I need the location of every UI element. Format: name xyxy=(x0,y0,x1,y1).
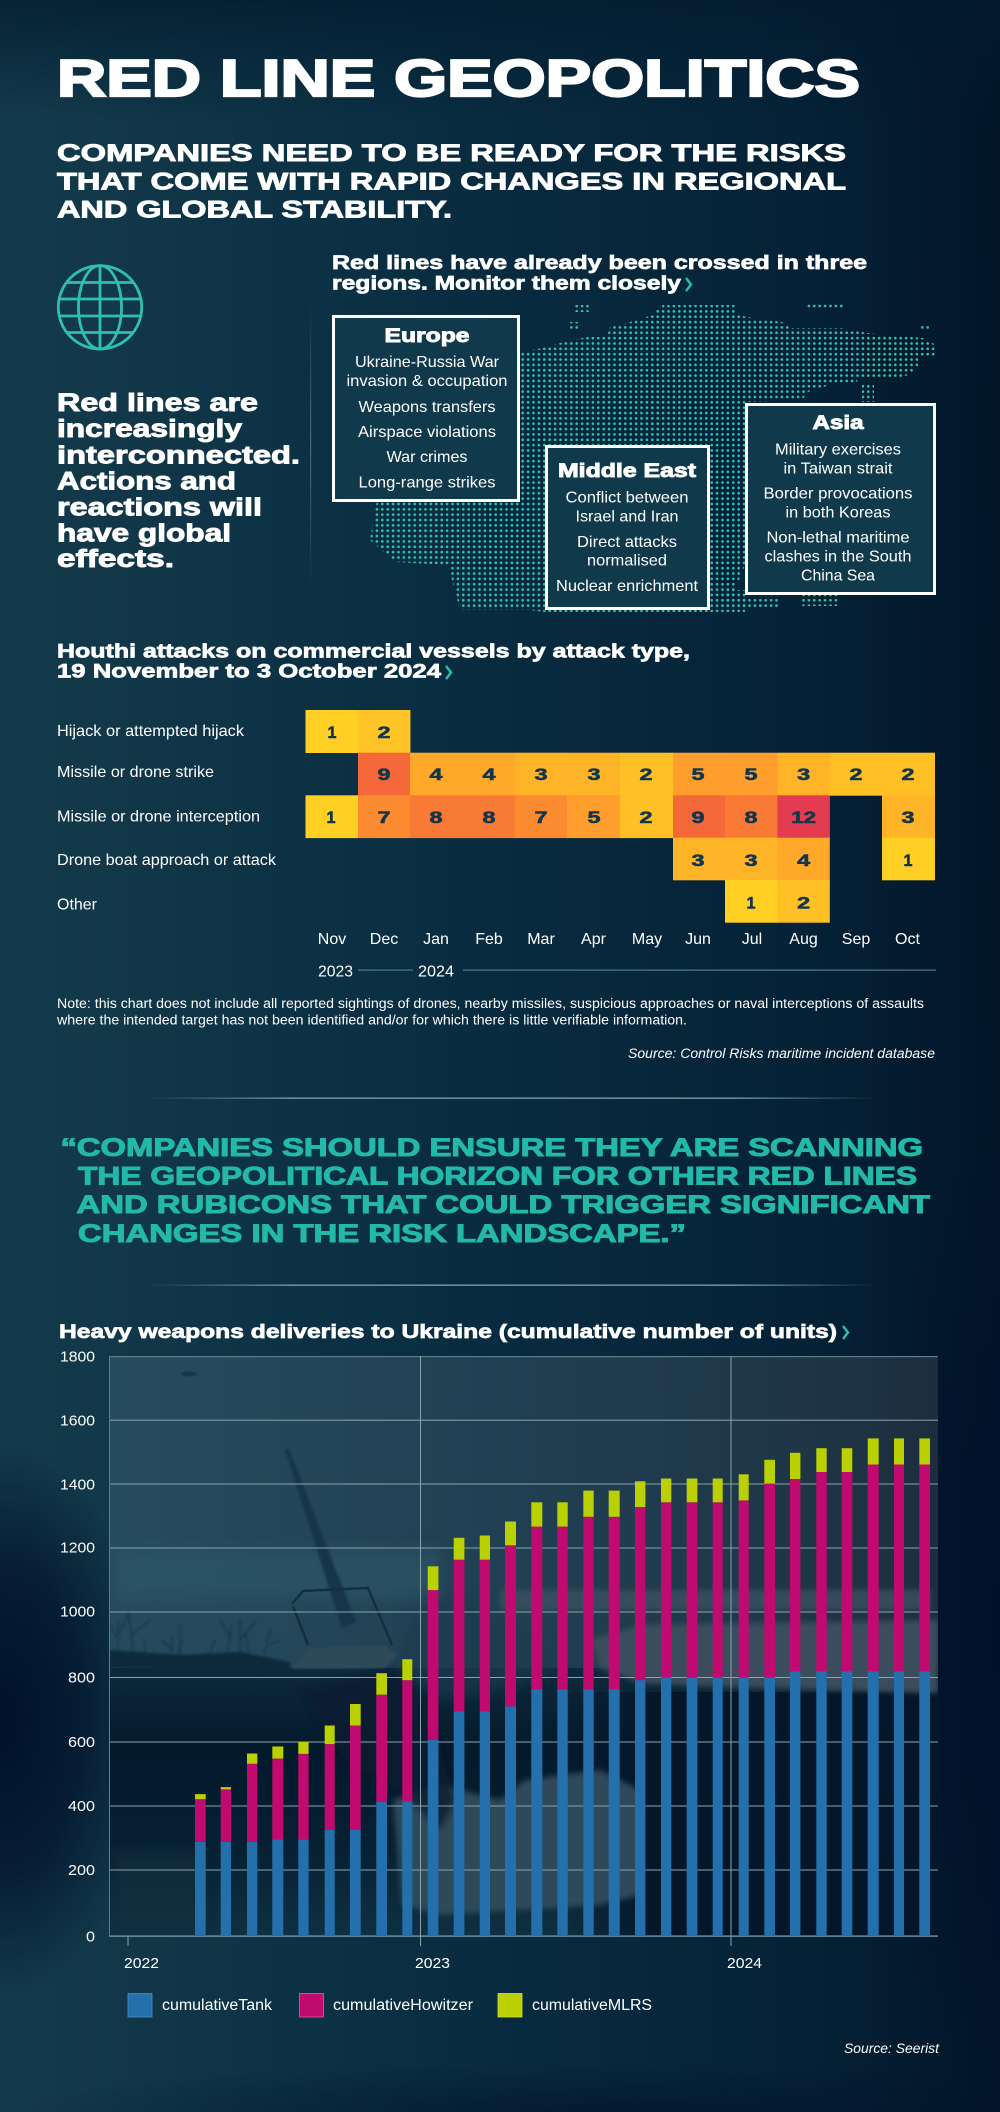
heatmap row: missile or drone interception: 9 xyxy=(692,808,704,827)
panel: Europe: Ukraine-Russia War xyxy=(355,354,500,371)
panel: Asia: China Sea xyxy=(801,568,875,585)
heatmap year axis: 2023 xyxy=(318,964,353,981)
heading: red lines crossed xyxy=(332,253,867,294)
title: RED LINE GEOPOLITICS xyxy=(57,50,860,108)
note xyxy=(56,996,924,1028)
heatmap row: missile or drone strike: 5 xyxy=(744,765,758,784)
heatmap month labels: Jun xyxy=(685,931,711,948)
heatmap row: drone boat: 4 xyxy=(797,851,811,870)
heatmap month labels: Oct xyxy=(895,931,920,948)
y axis labels: 1400 xyxy=(60,1476,95,1494)
heatmap row labels xyxy=(57,723,277,913)
text block: red lines interconnected: have global xyxy=(57,520,231,548)
chart legend: cumulativeTank xyxy=(162,1997,272,2014)
dotted world map xyxy=(370,304,936,612)
heatmap month labels: Aug xyxy=(789,931,818,948)
y axis labels: 800 xyxy=(68,1670,95,1686)
panel: Europe: War crimes xyxy=(386,449,468,466)
panel: Asia xyxy=(746,404,934,594)
heatmap row: hijack: 2 xyxy=(378,723,390,742)
heatmap row: other: 2 xyxy=(797,894,810,912)
panel: Asia: in both Koreas xyxy=(786,505,890,522)
panel: Europe: Weapons transfers xyxy=(358,399,496,416)
heatmap row labels: Other xyxy=(57,896,98,913)
subheading xyxy=(57,140,846,224)
x axis labels: 2023 xyxy=(415,1955,450,1972)
y axis labels: 1800 xyxy=(60,1348,95,1366)
heatmap row: missile or drone strike: 3 xyxy=(797,765,810,784)
heatmap row: hijack: 1 xyxy=(328,723,336,742)
heatmap row labels: Missile or drone interception xyxy=(57,809,260,826)
panel: Europe: Europe xyxy=(384,326,470,347)
y axis labels: 200 xyxy=(68,1862,95,1879)
heatmap row: missile or drone strike: 2 xyxy=(902,765,914,784)
heatmap row: missile or drone interception: 1 xyxy=(326,808,336,827)
panel: Asia: Asia xyxy=(812,413,864,434)
heatmap month labels xyxy=(318,931,920,948)
heatmap row: missile or drone strike: 5 xyxy=(692,765,704,784)
heatmap row: missile or drone interception: 3 xyxy=(902,808,914,827)
text block: red lines interconnected: Red lines are xyxy=(57,389,258,417)
heatmap month labels: Jul xyxy=(742,931,762,948)
bar series: cumulativeHowitzer xyxy=(195,1464,930,1842)
text block: red lines interconnected: reactions will xyxy=(57,494,262,522)
x axis labels: 2022 xyxy=(124,1955,159,1972)
heatmap year axis xyxy=(318,964,936,981)
panel: Middle East: Conflict between xyxy=(566,490,688,507)
pull quote: AND RUBICONS THAT COULD TRIGGER SIGNIFICANT xyxy=(76,1191,930,1219)
heatmap year axis: 2024 xyxy=(418,964,454,981)
panel: Europe: Long-range strikes xyxy=(358,474,496,492)
source: heatmap: Source: Control Risks maritime incident database xyxy=(628,1046,935,1061)
icon: globe xyxy=(58,266,142,349)
heatmap row: missile or drone interception: 5 xyxy=(588,808,600,827)
heatmap month labels: Feb xyxy=(475,931,503,948)
heatmap row: missile or drone strike: 9 xyxy=(378,765,390,784)
panel: Asia: in Taiwan strait xyxy=(784,461,893,478)
heatmap row: missile or drone strike xyxy=(358,753,935,796)
heatmap row: missile or drone strike: 4 xyxy=(482,765,496,784)
y axis labels: 400 xyxy=(68,1798,95,1815)
chart legend xyxy=(128,1994,652,2017)
heading: red lines crossed: regions. Monitor them closely xyxy=(332,274,682,294)
note: where the intended target has not been identified and/or for which there is little verifiable information. xyxy=(56,1012,687,1028)
panel: Middle East xyxy=(546,446,708,608)
heatmap row labels: Missile or drone strike xyxy=(57,764,214,781)
panel: Middle East: normalised xyxy=(587,553,667,570)
heatmap row labels: Hijack or attempted hijack xyxy=(57,723,245,740)
note: Note: this chart does not include all reported sightings of drones, nearby missiles, suspicious approaches or naval interceptions of assaults xyxy=(57,996,924,1011)
pull quote: “COMPANIES SHOULD ENSURE THEY ARE SCANNING xyxy=(60,1134,923,1162)
heatmap row: missile or drone strike: 4 xyxy=(430,765,443,784)
panel: Middle East: Nuclear enrichment xyxy=(556,578,699,595)
bar series: cumulativeMLRS xyxy=(195,1438,930,1799)
heatmap row: drone boat: 3 xyxy=(744,851,758,870)
y axis labels: 1000 xyxy=(60,1604,95,1620)
panel: Asia: Military exercises xyxy=(775,442,901,459)
heatmap row: missile or drone strike: 3 xyxy=(588,765,600,784)
text block: red lines interconnected xyxy=(57,389,300,573)
heatmap row: missile or drone interception: 7 xyxy=(378,808,390,827)
subheading: THAT COME WITH RAPID CHANGES IN REGIONAL xyxy=(57,168,846,196)
subheading: COMPANIES NEED TO BE READY FOR THE RISKS xyxy=(57,140,846,167)
heatmap month labels: Jan xyxy=(423,931,449,948)
heatmap row: missile or drone interception: 7 xyxy=(534,808,548,827)
heatmap month labels: Mar xyxy=(527,931,555,948)
chart legend: cumulativeMLRS xyxy=(532,1997,652,2014)
y axis labels: 1200 xyxy=(60,1540,95,1556)
y axis labels: 1600 xyxy=(60,1412,95,1430)
heatmap month labels: Apr xyxy=(581,931,607,948)
bar series: cumulativeTank xyxy=(195,1671,930,1936)
heatmap row: other: 1 xyxy=(746,894,756,912)
heatmap row: drone boat: 3 xyxy=(692,851,704,870)
panel: Asia: Non-lethal maritime xyxy=(766,530,910,547)
text block: red lines interconnected: effects. xyxy=(57,545,174,573)
panel: Middle East: Israel and Iran xyxy=(576,509,678,526)
heatmap month labels: Sep xyxy=(842,931,870,948)
panel: Europe: Airspace violations xyxy=(358,424,496,441)
heatmap month labels: Dec xyxy=(370,931,398,948)
heatmap month labels: May xyxy=(632,931,662,948)
panel: Middle East: Middle East xyxy=(558,461,697,482)
pull quote: CHANGES IN THE RISK LANDSCAPE.” xyxy=(78,1220,686,1248)
y axis labels: 0 xyxy=(86,1928,95,1946)
heatmap row: missile or drone strike: 3 xyxy=(534,765,548,784)
panel: Middle East: Direct attacks xyxy=(577,534,677,551)
heading: Houthi attacks: 19 November to 3 October 2024 xyxy=(57,662,442,683)
heatmap row: hijack xyxy=(306,710,410,753)
subheading: AND GLOBAL STABILITY. xyxy=(57,196,452,224)
heatmap row: other xyxy=(725,880,830,923)
y axis labels: 600 xyxy=(68,1734,95,1751)
heatmap row: missile or drone interception: 8 xyxy=(482,808,496,827)
heading: red lines crossed: Red lines have already been crossed in three xyxy=(332,253,867,274)
source: weapons chart: Source: Seerist xyxy=(844,2041,940,2056)
pull quote xyxy=(60,1134,930,1248)
panel: Asia: clashes in the South xyxy=(764,549,912,566)
heatmap row: missile or drone strike: 2 xyxy=(850,765,862,784)
heading: Houthi attacks xyxy=(57,642,690,683)
chart legend: cumulativeHowitzer xyxy=(333,1997,473,2014)
heading: heavy weapons: Heavy weapons deliveries to Ukraine (cumulative number of units) xyxy=(59,1322,837,1343)
text block: red lines interconnected: increasingly xyxy=(57,415,242,443)
text block: red lines interconnected: interconnected. xyxy=(57,442,300,470)
heatmap row: missile or drone interception: 8 xyxy=(744,808,758,827)
x axis labels: 2024 xyxy=(727,1955,762,1972)
text block: red lines interconnected: Actions and xyxy=(57,468,236,496)
heatmap row: missile or drone strike: 2 xyxy=(640,765,652,784)
pull quote: THE GEOPOLITICAL HORIZON FOR OTHER RED LINES xyxy=(78,1162,917,1190)
x axis labels xyxy=(124,1955,762,1972)
heatmap row: drone boat xyxy=(673,838,935,880)
heatmap month labels: Nov xyxy=(318,931,346,948)
heatmap row: missile or drone interception: 8 xyxy=(430,808,442,827)
panel: Europe xyxy=(334,316,518,500)
panel: Europe: invasion & occupation xyxy=(346,373,508,390)
heatmap row: drone boat: 1 xyxy=(904,851,912,870)
heading: Houthi attacks: Houthi attacks on commercial vessels by attack type, xyxy=(57,642,690,663)
heatmap row labels: Drone boat approach or attack xyxy=(57,852,277,869)
panel: Asia: Border provocations xyxy=(764,486,912,503)
chart gridlines xyxy=(109,1356,938,1946)
chart background photo xyxy=(109,1356,938,1936)
heatmap row: missile or drone interception xyxy=(306,795,935,838)
heatmap row: missile or drone interception: 2 xyxy=(640,808,652,827)
y axis labels xyxy=(60,1348,95,1946)
heatmap row: missile or drone interception: 12 xyxy=(791,808,816,827)
